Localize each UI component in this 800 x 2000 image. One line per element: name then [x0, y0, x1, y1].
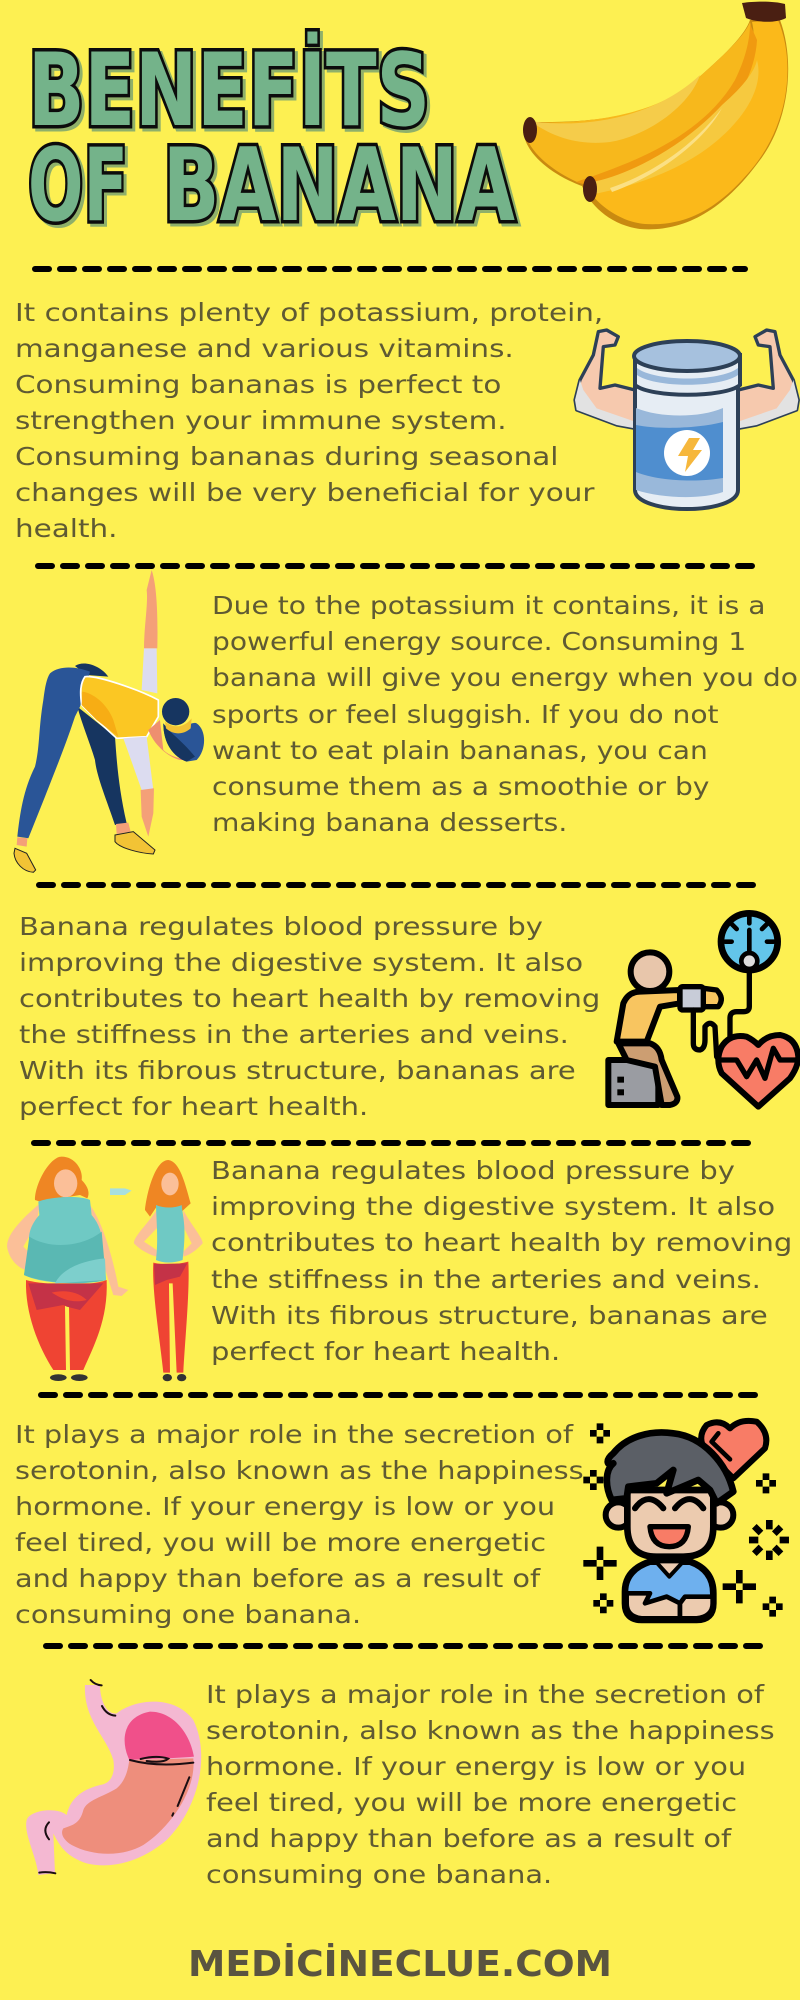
divider 1 — [35, 266, 745, 272]
title: BENEFİTS — [28, 30, 430, 149]
panel: energy source — [14, 570, 798, 872]
text: blood pressure: With its fibrous structure, bananas are — [19, 1057, 576, 1085]
text: digestion: serotonin, also known as the happiness — [206, 1717, 775, 1745]
text: digestion: It plays a major role in the secretion of — [206, 1681, 765, 1709]
text: energy source: consume them as a smoothie or by — [212, 772, 709, 802]
text: immune system: health. — [15, 515, 118, 543]
icon: banana bunch — [523, 2, 788, 229]
divider 5 — [41, 1392, 758, 1398]
icon: stretching woman — [14, 570, 204, 872]
text: energy source: want to eat plain bananas, you can — [212, 736, 708, 766]
text: immune system: It contains plenty of potassium, protein, — [15, 299, 603, 327]
text: happiness: hormone. If your energy is low or you — [15, 1493, 555, 1521]
text: energy source: banana will give you energy when you do — [212, 663, 798, 693]
divider 6 — [46, 1643, 763, 1649]
text: digestion: consuming one banana. — [206, 1861, 552, 1889]
text: immune system: strengthen your immune system. — [15, 407, 507, 435]
text: weight loss: Banana regulates blood pressure by — [211, 1157, 735, 1185]
text: blood pressure: the stiffness in the arteries and veins. — [19, 1021, 569, 1049]
text: energy source: powerful energy source. Consuming 1 — [212, 627, 746, 657]
panel: weight loss — [7, 1157, 792, 1381]
footer: MEDİCİNECLUE.COM — [188, 1943, 612, 1985]
text: energy source: sports or feel sluggish. If you do not — [212, 700, 719, 730]
icon: before and after weight loss — [7, 1157, 203, 1381]
text: happiness: feel tired, you will be more energetic — [15, 1529, 546, 1557]
divider 2 — [38, 563, 755, 569]
title: OF — [28, 126, 128, 244]
text: energy source — [212, 591, 798, 838]
text: happiness: serotonin, also known as the happiness — [15, 1457, 584, 1485]
title: BANANA — [163, 126, 515, 244]
text: happiness: It plays a major role in the secretion of — [15, 1421, 574, 1449]
divider 4 — [34, 1140, 750, 1146]
text: immune system: changes will be very beneficial for your — [15, 479, 595, 507]
title — [28, 30, 515, 244]
text: weight loss: the stiffness in the arteries and veins. — [211, 1266, 761, 1294]
text: digestion: feel tired, you will be more energetic — [206, 1789, 737, 1817]
divider 3 — [39, 882, 755, 888]
text: energy source: making banana desserts. — [212, 808, 567, 838]
text: happiness: consuming one banana. — [15, 1601, 361, 1629]
text: energy source: Due to the potassium it contains, it is a — [212, 591, 765, 621]
text: blood pressure — [19, 913, 600, 1121]
icon: stomach — [26, 1680, 201, 1875]
panel: immune system — [15, 299, 798, 543]
text: weight loss: contributes to heart health by removing — [211, 1229, 792, 1257]
text: immune system: Consuming bananas during seasonal — [15, 443, 558, 471]
text: weight loss: improving the digestive system. It also — [211, 1193, 775, 1221]
text: weight loss: perfect for heart health. — [211, 1338, 560, 1366]
text: blood pressure: improving the digestive system. It also — [19, 949, 583, 977]
text: blood pressure: perfect for heart health. — [19, 1093, 368, 1121]
text: immune system — [15, 299, 603, 543]
icon: flexing supplement jar — [575, 330, 798, 509]
text: weight loss: With its fibrous structure, bananas are — [211, 1302, 768, 1330]
text: blood pressure: contributes to heart health by removing — [19, 985, 600, 1013]
panel: blood pressure — [19, 913, 798, 1121]
text: immune system: manganese and various vitamins. — [15, 335, 514, 363]
text: digestion: and happy than before as a result of — [206, 1825, 732, 1853]
icon: blood pressure and heart — [608, 913, 798, 1107]
text: immune system: Consuming bananas is perfect to — [15, 371, 501, 399]
text: happiness: and happy than before as a result of — [15, 1565, 541, 1593]
text: digestion: hormone. If your energy is low or you — [206, 1753, 746, 1781]
text: happiness — [15, 1421, 584, 1629]
panel: digestion — [26, 1680, 775, 1889]
panel: happiness — [15, 1421, 789, 1629]
text: digestion — [206, 1681, 775, 1889]
icon: happy boy with heart — [583, 1421, 789, 1620]
text: weight loss — [211, 1157, 792, 1366]
text: blood pressure: Banana regulates blood pressure by — [19, 913, 543, 941]
